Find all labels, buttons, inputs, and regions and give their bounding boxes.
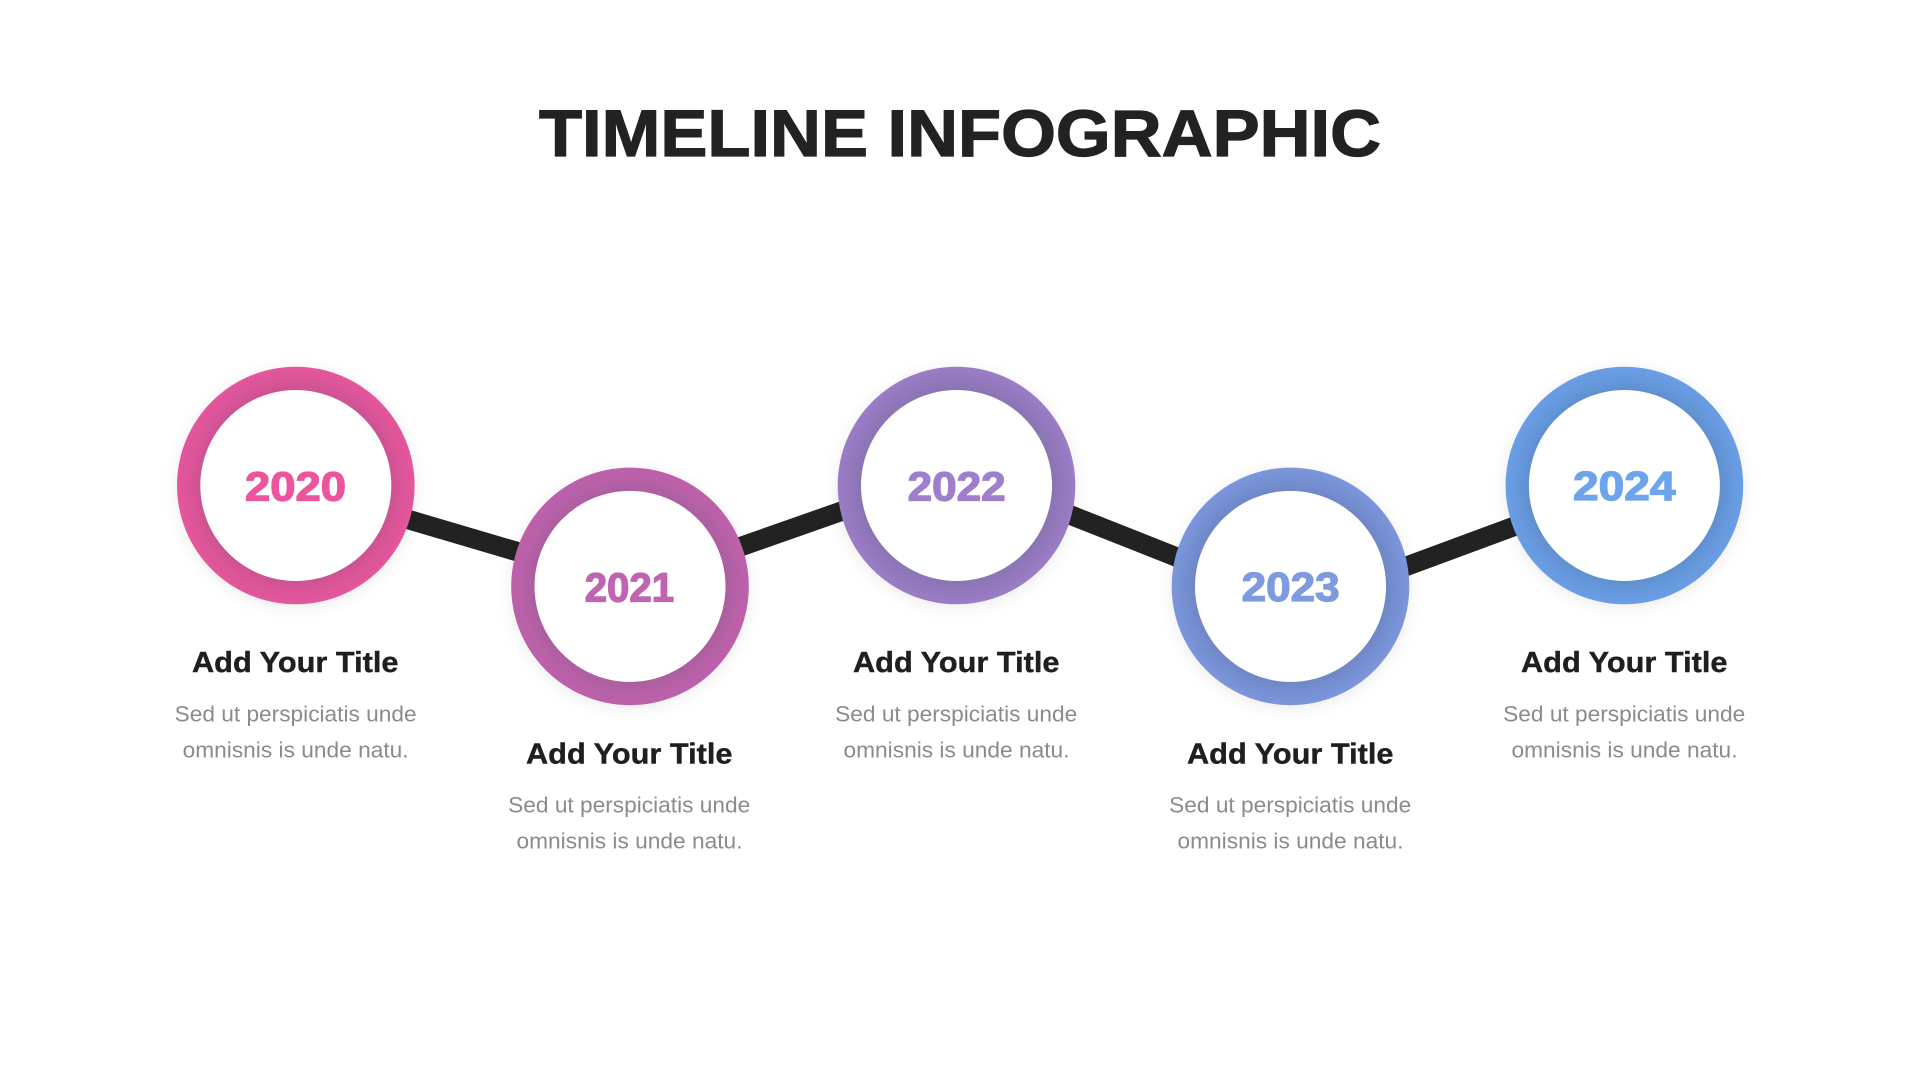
line: 2021 to 2022: [714, 501, 870, 556]
description 2023: omnisnis is unde natu.: [1178, 829, 1404, 854]
description 2020: Sed ut perspiciatis unde: [175, 701, 417, 726]
heading 2023: Add Your Title: [1187, 738, 1394, 770]
year 2022: 2022: [908, 463, 1006, 509]
description 2022: omnisnis is unde natu.: [844, 737, 1070, 762]
ring 2020: [177, 367, 415, 604]
line: 2023 to 2024: [1380, 517, 1540, 576]
ring 2022: [838, 367, 1075, 604]
line: 2022 to 2023: [1040, 503, 1205, 568]
year 2024: 2024: [1573, 463, 1676, 509]
connector lines: [378, 501, 1540, 576]
ring 2023: [1172, 468, 1409, 705]
milestone 2024: [1503, 367, 1745, 762]
description 2022: Sed ut perspiciatis unde: [835, 701, 1077, 726]
description 2022: [835, 701, 1077, 762]
year 2020: 2020: [245, 464, 346, 510]
heading 2024: Add Your Title: [1521, 647, 1728, 679]
milestone 2022: [835, 367, 1077, 762]
description 2023: [1169, 792, 1411, 854]
description 2024: omnisnis is unde natu.: [1512, 737, 1738, 762]
year 2023: 2023: [1242, 564, 1340, 610]
line: 2020 to 2021: [378, 511, 540, 558]
heading 2020: Add Your Title: [192, 647, 398, 679]
heading 2022: Add Your Title: [853, 647, 1060, 679]
description 2020: omnisnis is unde natu.: [183, 737, 409, 762]
ring 2021: [511, 468, 749, 705]
description 2021: [508, 792, 750, 854]
description 2020: [175, 701, 417, 762]
description 2024: Sed ut perspiciatis unde: [1503, 701, 1745, 726]
year 2021: 2021: [585, 564, 674, 610]
ring 2024: [1506, 367, 1743, 604]
description 2021: Sed ut perspiciatis unde: [508, 792, 750, 817]
title: TIMELINE INFOGRAPHIC: [539, 96, 1381, 170]
milestone 2021: [508, 468, 750, 854]
heading 2021: Add Your Title: [526, 738, 732, 770]
milestone 2020: [175, 367, 417, 762]
milestone 2023: [1169, 468, 1411, 854]
description 2023: Sed ut perspiciatis unde: [1169, 792, 1411, 817]
description 2021: omnisnis is unde natu.: [516, 829, 742, 854]
description 2024: [1503, 701, 1745, 762]
